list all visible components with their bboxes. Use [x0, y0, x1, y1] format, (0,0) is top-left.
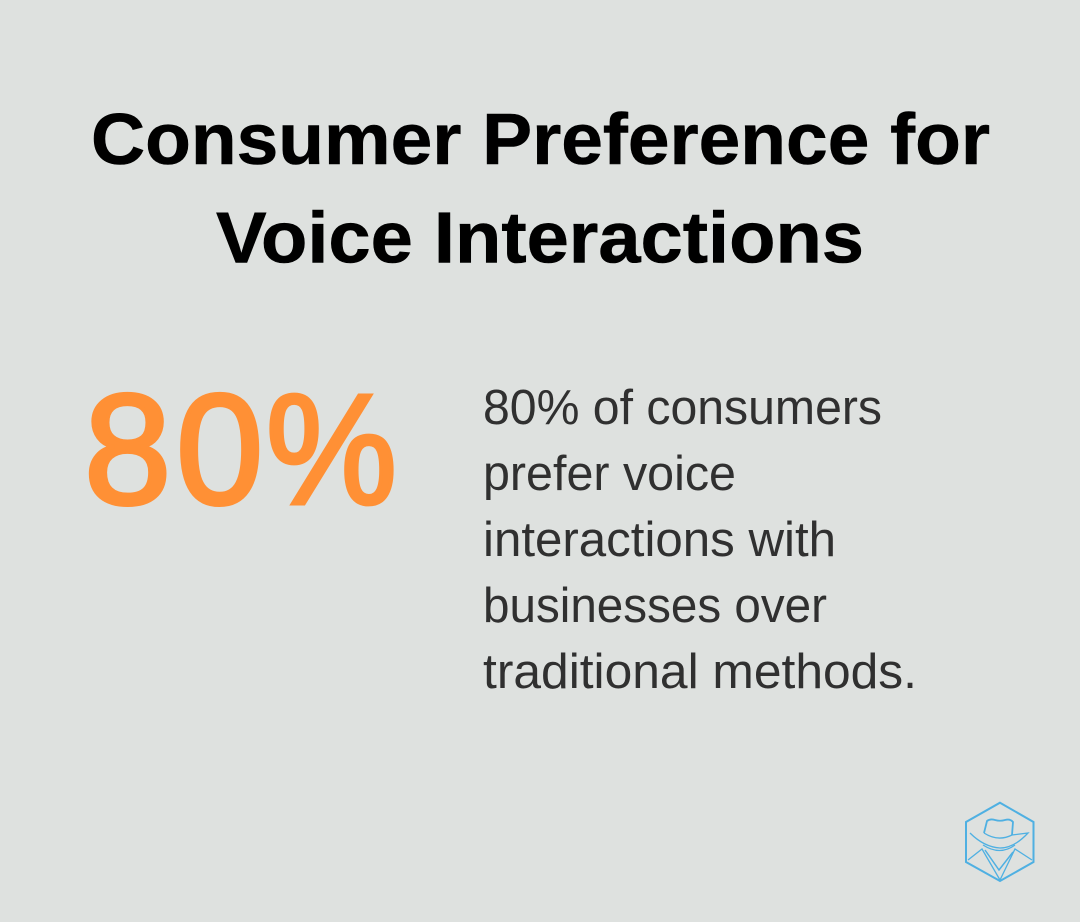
title: [91, 99, 990, 278]
title: Voice Interactions: [216, 198, 864, 278]
description text: prefer voice: [483, 447, 736, 501]
icon: hexagon spy logo: [966, 803, 1034, 881]
description text: businesses over: [483, 579, 827, 633]
big statistic: 80%: 0: [176, 362, 263, 538]
title: Consumer Preference for: [91, 99, 990, 180]
description text: [483, 381, 917, 699]
description text: 80% of consumers: [483, 381, 882, 435]
description text: interactions with: [483, 513, 836, 567]
description text: traditional methods.: [483, 645, 917, 699]
big statistic: 80%: [84, 362, 397, 538]
big statistic: 80%: 8: [84, 362, 171, 538]
big statistic: 80%: %: [266, 362, 397, 538]
